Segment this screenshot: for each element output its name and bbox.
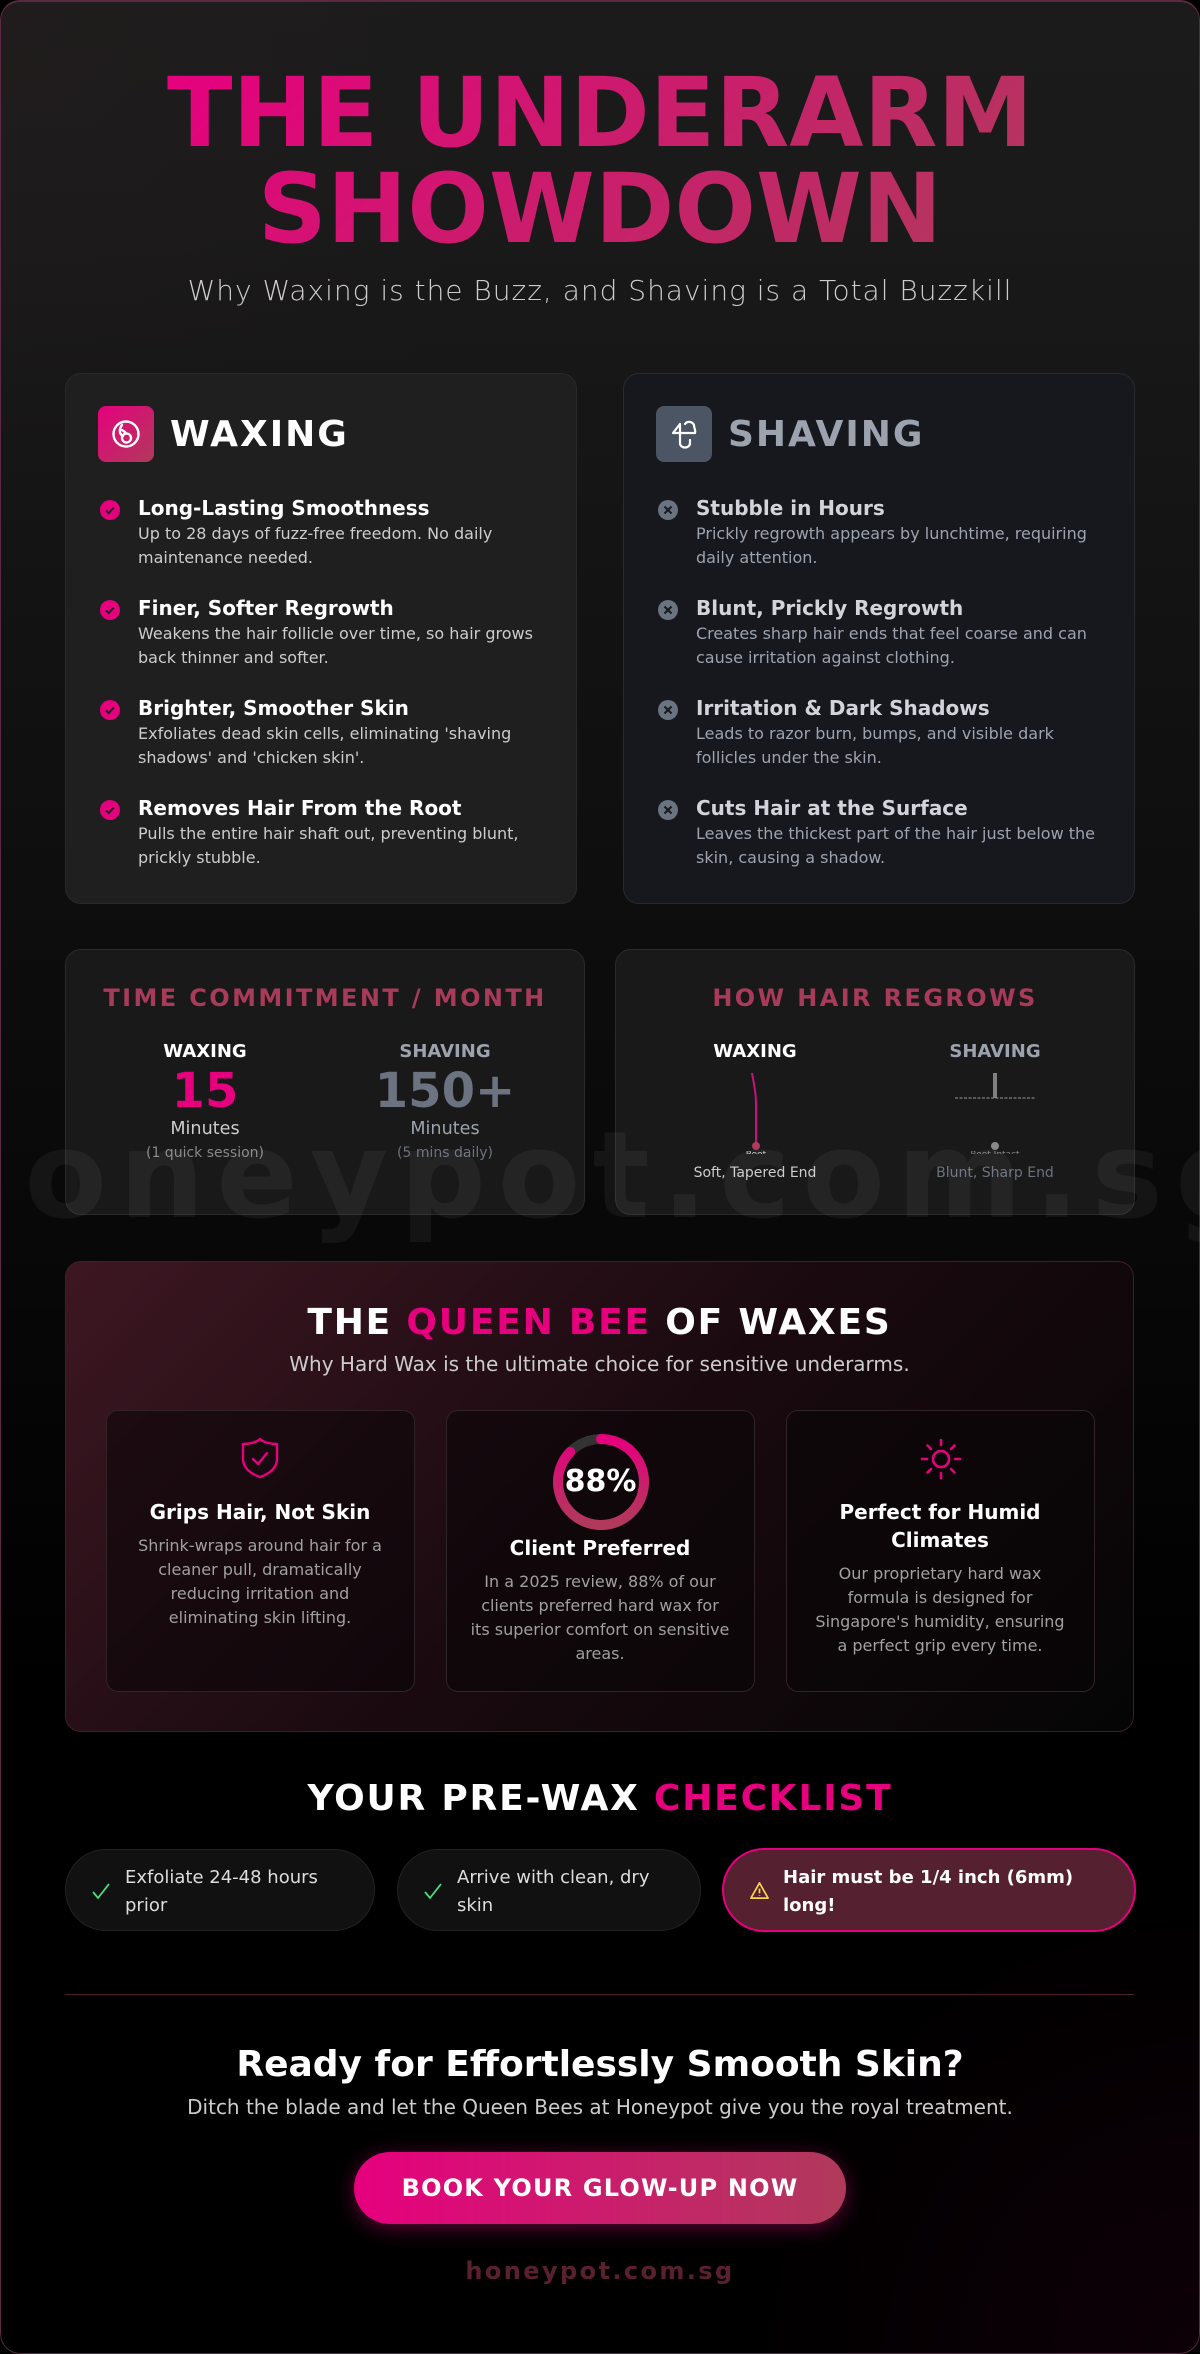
cta heading: Ready for Effortlessly Smooth Skin? [236,2044,964,2085]
drawback text [696,824,1095,867]
card text: Shrink-wraps around hair for a [138,1536,382,1555]
checklist heading: YOUR PRE-WAX CHECKLIST [307,1778,893,1819]
title [161,65,1039,257]
queen bee subheading: Why Hard Wax is the ultimate choice for sensitive underarms. [289,1352,910,1376]
title: SHOWDOWN [258,153,942,265]
card text: its superior comfort on sensitive [471,1620,729,1639]
waxing label: WAXING [713,1041,797,1062]
item text: Exfoliate 24-48 hours [125,1867,318,1888]
waxing hair: Root [746,1150,767,1160]
card: client preferred [446,1410,754,1692]
item text [457,1867,650,1916]
card text: eliminating skin lifting. [169,1608,351,1627]
drawback title: Cuts Hair at the Surface [696,796,968,820]
card: grips hair [106,1410,414,1692]
shaving caption: Blunt, Sharp End [936,1165,1054,1181]
waxing unit: Minutes [170,1119,240,1139]
drawback title: Irritation & Dark Shadows [696,696,990,720]
stat: shaving time [375,1041,515,1161]
card text [138,1536,382,1627]
shaving unit: Minutes [410,1119,480,1139]
benefit text [138,824,518,867]
benefit text [138,724,511,767]
drawback text: Leaves the thickest part of the hair just below the [696,824,1095,843]
cta button [354,2152,846,2224]
card text [815,1564,1065,1655]
panel: waxing [65,373,577,904]
icon: check [424,1884,442,1900]
regrowth heading: HOW HAIR REGROWS [712,984,1038,1012]
waxing number: 15 [172,1063,238,1119]
panel: queen bee [65,1261,1134,1732]
icon: check [100,800,120,820]
drawback: blunt regrowth [658,596,1087,667]
shaving hair [955,1073,1036,1160]
shaving label: SHAVING [399,1041,491,1062]
cta text: Ditch the blade and let the Queen Bees at Honeypot give you the royal treatment. [187,2095,1013,2119]
benefit title: Brighter, Smoother Skin [138,696,409,720]
footer url: honeypot.com.sg [465,2257,735,2285]
drawback text [696,524,1087,567]
card text: reducing irritation and [171,1584,349,1603]
drawback text: cause irritation against clothing. [696,648,955,667]
card text: cleaner pull, dramatically [158,1560,362,1579]
card text: Singapore's humidity, ensuring [815,1612,1065,1631]
card title [840,1500,1040,1552]
icon: cross [658,700,678,720]
waxing note: (1 quick session) [146,1145,264,1161]
benefit title: Long-Lasting Smoothness [138,496,430,520]
item text [125,1867,318,1916]
drawback title: Stubble in Hours [696,496,885,520]
waxing hair [746,1072,766,1154]
icon: waxing [98,406,154,462]
icon: check [100,700,120,720]
card text: a perfect grip every time. [837,1636,1043,1655]
chart: hair diagrams [746,1072,1034,1154]
benefit text: Pulls the entire hair shaft out, preventing blunt, [138,824,518,843]
shaving label: SHAVING [949,1041,1041,1062]
drawback text: follicles under the skin. [696,748,882,767]
subtitle: Why Waxing is the Buzz, and Shaving is a Total Buzzkill [188,274,1012,307]
benefit text [138,524,492,567]
cta button: BOOK YOUR GLOW-UP NOW [402,2174,798,2202]
card title: Client Preferred [510,1536,690,1560]
checklist item: hair length warning [722,1848,1136,1932]
time heading: TIME COMMITMENT / MONTH [103,984,547,1012]
shaving heading: SHAVING [728,414,924,455]
benefit: long-lasting [100,496,492,567]
card text: In a 2025 review, 88% of our [484,1572,716,1591]
benefit text: shadows' and 'chicken skin'. [138,748,364,767]
card: humid climates [786,1410,1094,1692]
drawback text: Creates sharp hair ends that feel coarse and can [696,624,1087,643]
title: THE UNDERARM [167,57,1033,169]
chart: 88% donut [553,1434,649,1530]
card text [471,1572,729,1663]
benefit title: Finer, Softer Regrowth [138,596,394,620]
drawback text: Leads to razor burn, bumps, and visible dark [696,724,1054,743]
item text: long! [783,1895,835,1916]
donut value: 88% [565,1464,636,1499]
item text: skin [457,1895,493,1916]
card text: formula is designed for [848,1588,1032,1607]
benefit: finer regrowth [100,596,533,667]
item text [783,1864,1073,1920]
shaving hair: Root Intact [970,1150,1020,1160]
benefit text: Exfoliates dead skin cells, eliminating 'shaving [138,724,511,743]
benefit text: Weakens the hair follicle over time, so hair grows [138,624,533,643]
drawback text: Prickly regrowth appears by lunchtime, requiring [696,524,1087,543]
stat: waxing time [146,1041,264,1161]
queen bee heading: THE QUEEN BEE OF WAXES [307,1302,892,1343]
drawback text [696,724,1054,767]
benefit text: back thinner and softer. [138,648,329,667]
benefit: brighter skin [100,696,511,767]
card title: Perfect for Humid [840,1500,1040,1524]
panel: time commitment [65,949,585,1215]
card title: Climates [891,1528,989,1552]
icon: check [100,500,120,520]
icon: cross [658,800,678,820]
item text: Arrive with clean, dry [457,1867,650,1888]
drawback text: skin, causing a shadow. [696,848,885,867]
waxing label: WAXING [163,1041,247,1062]
icon: sun [920,1438,962,1480]
divider [65,1994,1134,1995]
item text: prior [125,1895,167,1916]
item text: Hair must be 1/4 inch (6mm) [783,1867,1073,1888]
shaving note: (5 mins daily) [397,1145,493,1161]
drawback: irritation [658,696,1054,767]
icon: check [92,1884,110,1900]
drawback: cuts at surface [658,796,1095,867]
panel: shaving [623,373,1135,904]
benefit text: maintenance needed. [138,548,313,567]
card text: clients preferred hard wax for [481,1596,719,1615]
icon: cross [658,600,678,620]
benefit text: prickly stubble. [138,848,261,867]
card title: Grips Hair, Not Skin [150,1500,370,1524]
benefit title: Removes Hair From the Root [138,796,462,820]
drawback: stubble [658,496,1087,567]
icon: check [100,600,120,620]
drawback text [696,624,1087,667]
card text: areas. [575,1644,625,1663]
checklist item: arrive clean [397,1849,701,1931]
drawback title: Blunt, Prickly Regrowth [696,596,963,620]
panel: hair regrowth [615,949,1135,1215]
icon: shield [242,1438,278,1478]
drawback text: daily attention. [696,548,817,567]
card text: Our proprietary hard wax [839,1564,1041,1583]
checklist item: exfoliate [65,1849,375,1931]
benefit text: Up to 28 days of fuzz-free freedom. No daily [138,524,492,543]
icon: warning [750,1882,769,1899]
waxing heading: WAXING [170,414,349,455]
benefit text [138,624,533,667]
shaving number: 150+ [375,1063,515,1119]
icon: cross [658,500,678,520]
waxing caption: Soft, Tapered End [694,1165,816,1181]
icon: razor [656,406,712,462]
benefit: removes from root [100,796,518,867]
